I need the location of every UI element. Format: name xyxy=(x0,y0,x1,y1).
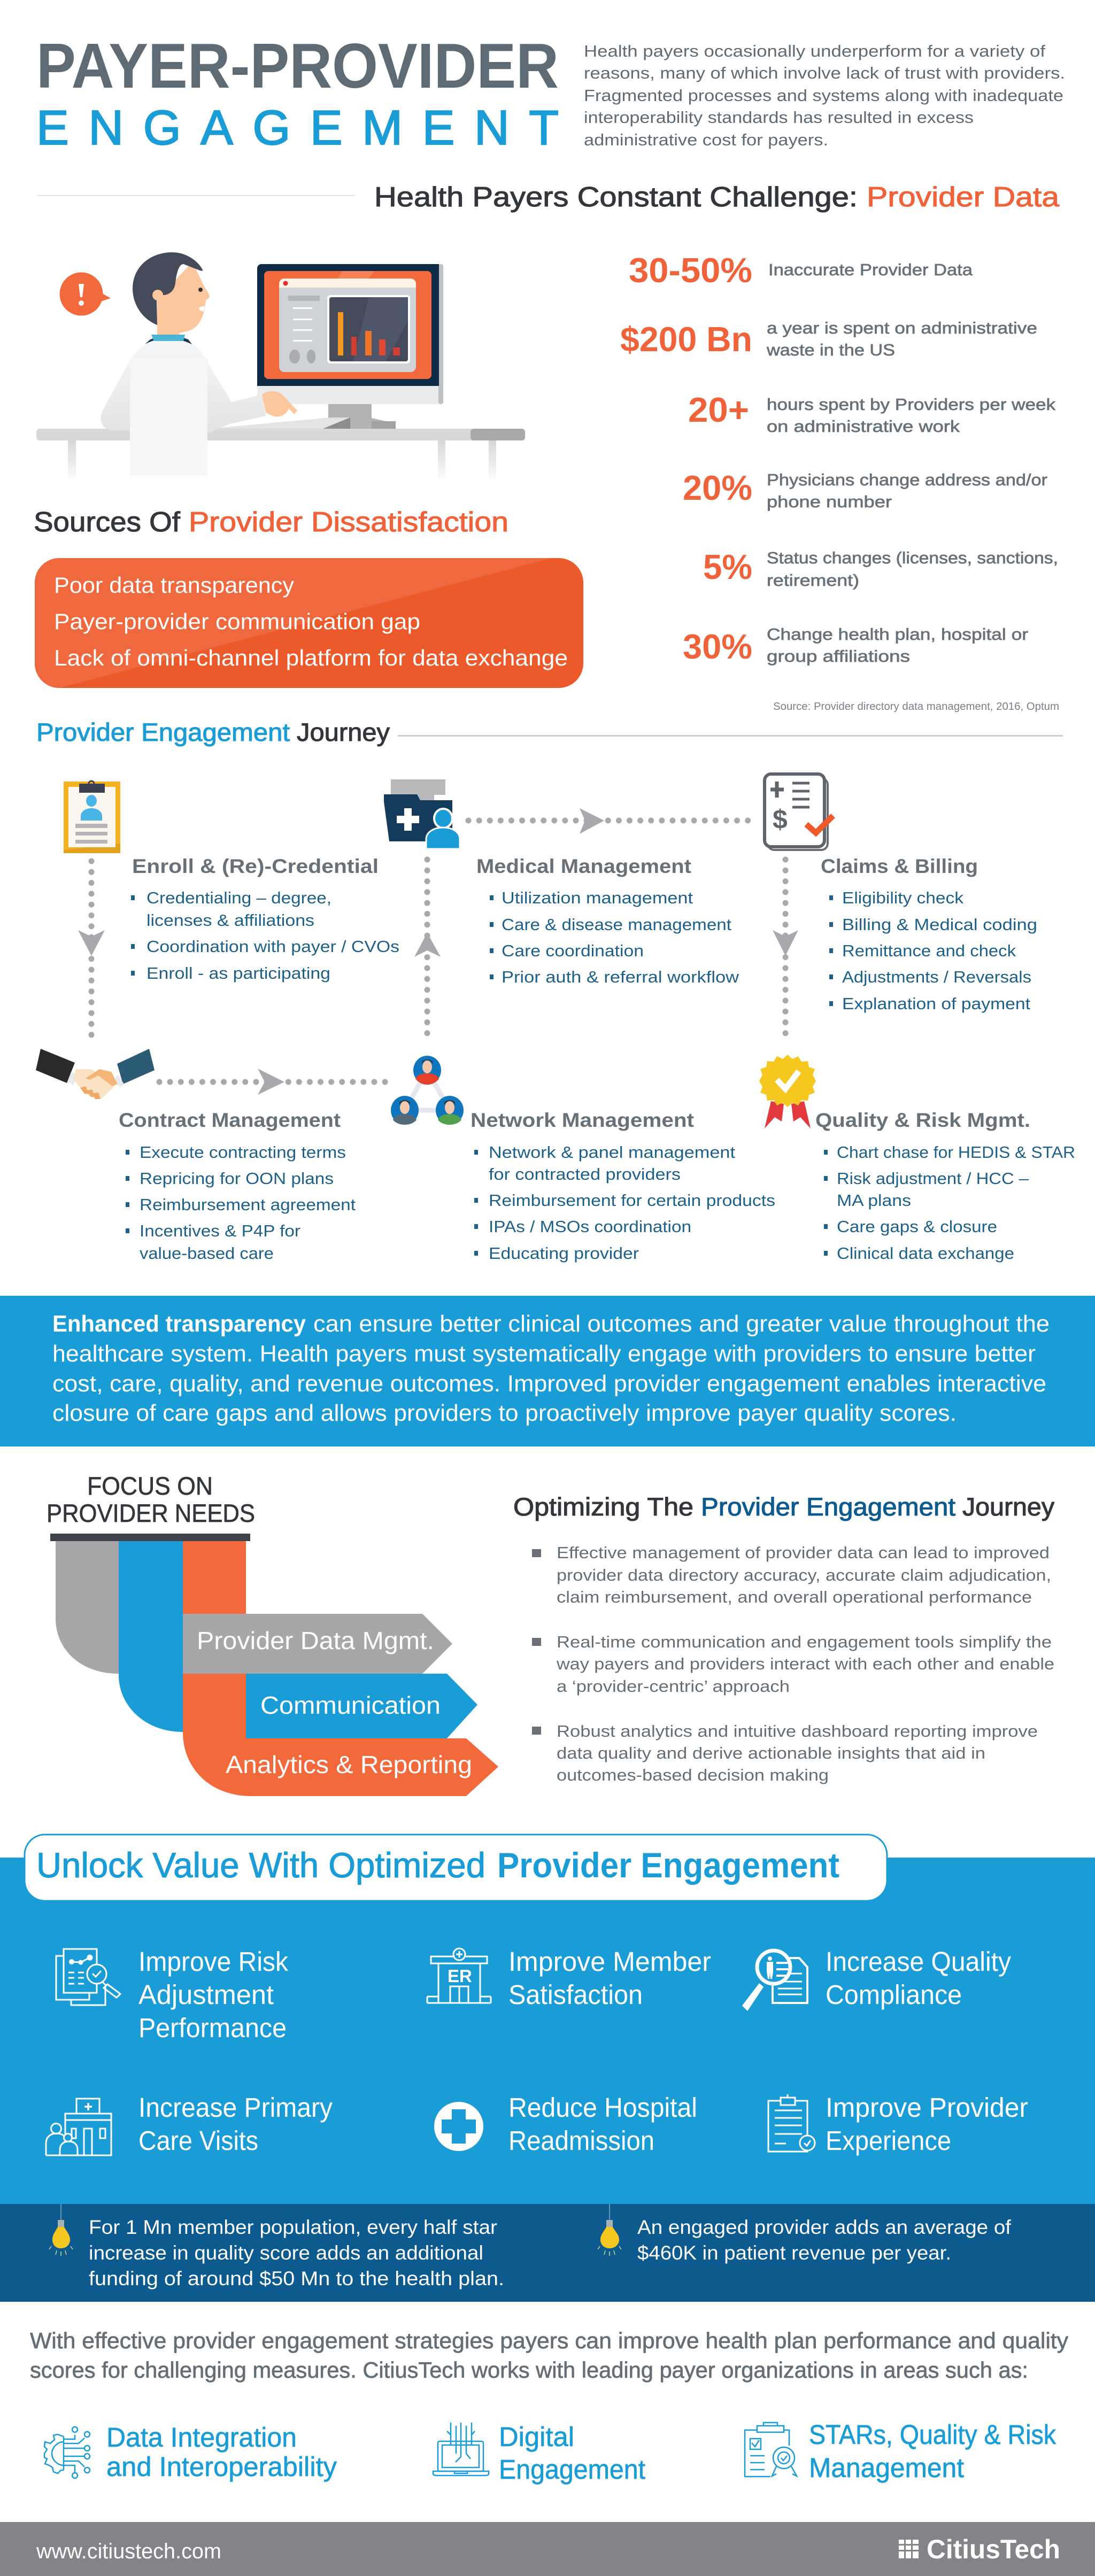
benefit: improve provider experience: Improve Provider xyxy=(826,2092,1028,2123)
intro paragraph: reasons, many of which involve lack of trust with providers. xyxy=(584,64,1065,82)
benefit: improve risk adjustment: Adjustment xyxy=(138,1979,274,2010)
stat: 20+: on administrative work xyxy=(767,417,960,436)
bullet list: Reimbursement for certain products xyxy=(489,1191,775,1210)
panel: revenue facts band xyxy=(0,2204,1095,2302)
point: communication xyxy=(532,1633,1054,1696)
bullet list: Incentives & P4P for xyxy=(140,1221,300,1240)
bullet list xyxy=(490,888,739,986)
bullet list: Care & disease management xyxy=(502,915,731,934)
point: communication: a ‘provider-centric’ approach xyxy=(557,1677,790,1696)
icon: quality medal xyxy=(759,1055,816,1128)
desk xyxy=(36,429,525,478)
fact: quality score funding: increase in quality score adds an additional xyxy=(89,2242,483,2264)
avatar: top xyxy=(413,1056,441,1085)
panel: contract management xyxy=(119,1109,356,1263)
stat: 20%: Physicians change address and/or xyxy=(767,470,1047,489)
bullet list: Reimbursement agreement xyxy=(140,1195,356,1214)
point: communication: way payers and providers interact with each other and enable xyxy=(556,1654,1054,1673)
icon: risk report xyxy=(56,1949,120,2005)
icon: clipboard award xyxy=(745,2423,797,2477)
panel: claims and billing xyxy=(821,855,1037,1013)
stat: 20%: phone number xyxy=(767,492,892,511)
heading: sources of provider dissatisfaction: Provider Dissatisfaction xyxy=(189,507,508,538)
bullet list: Chart chase for HEDIS & STAR xyxy=(837,1143,1075,1162)
bullet list: Enroll - as participating xyxy=(146,964,330,983)
heading: provider engagement journey xyxy=(36,718,1063,746)
stat: $200 Bn: $200 Bn xyxy=(620,320,752,359)
footer xyxy=(0,2522,1095,2576)
heading: provider engagement journey: Journey xyxy=(297,718,390,746)
bullet list: Credentialing – degree, xyxy=(146,888,331,907)
stat: 20+: hours spent by Providers per week xyxy=(767,395,1056,414)
heading: provider engagement journey: Provider Engagement xyxy=(36,718,290,746)
panel: quality and risk management xyxy=(815,1109,1075,1263)
intro paragraph xyxy=(584,42,1065,149)
fact: quality score funding: For 1 Mn member population, every half star xyxy=(89,2216,497,2238)
alert speech bubble xyxy=(60,273,111,315)
stat: 20+ xyxy=(688,390,1056,436)
text block: optimization points xyxy=(532,1543,1054,1784)
icon: ER building: ER xyxy=(448,1966,472,1986)
stat: 20%: 20% xyxy=(683,468,752,507)
intro paragraph: interoperability standards has resulted in excess xyxy=(584,108,974,127)
benefit: increase primary care visits: Care Visits xyxy=(138,2125,258,2156)
bullet list: licenses & affiliations xyxy=(146,911,314,930)
fact: quality score funding xyxy=(49,2204,504,2289)
text block: closing paragraph xyxy=(30,2328,1068,2382)
stat: 30-50% xyxy=(629,251,973,290)
heading: Medical Management xyxy=(476,855,691,877)
heading: sources of provider dissatisfaction xyxy=(34,507,508,538)
bullet list: Execute contracting terms xyxy=(140,1143,346,1162)
point: analytics: outcomes-based decision making xyxy=(557,1766,829,1784)
heading: health payers challenge xyxy=(37,182,1059,213)
benefit: reduce hospital readmission: Reduce Hospital xyxy=(508,2092,697,2123)
heading: focus on provider needs xyxy=(47,1472,255,1527)
ribbon: analytics and reporting: Analytics & Reporting xyxy=(226,1751,472,1778)
doctor figure xyxy=(101,252,297,476)
bullet list: Educating provider xyxy=(489,1244,639,1263)
diagram: provider needs ribbons xyxy=(50,1534,498,1796)
stat: 5%: 5% xyxy=(703,547,752,586)
journey connectors xyxy=(78,808,798,1095)
heading: focus on provider needs: FOCUS ON xyxy=(87,1472,213,1500)
bullet list xyxy=(131,888,399,983)
arrow: medical to claims xyxy=(468,808,751,834)
panel: enhanced transparency band: can ensure better clinical outcomes and greater value throughout the xyxy=(313,1311,1050,1337)
arrow: network to medical xyxy=(414,860,441,1044)
stat: 30%: group affiliations xyxy=(767,647,910,666)
icon: handshake xyxy=(36,1049,155,1099)
heading: unlock value: Provider Engagement xyxy=(497,1845,839,1885)
ribbon: communication: Communication xyxy=(260,1691,441,1719)
benefit: improve provider experience xyxy=(768,2092,1028,2156)
title xyxy=(36,30,559,155)
ribbon: provider data management xyxy=(183,1614,452,1674)
stat: 5% xyxy=(703,547,1058,590)
panel: enhanced transparency band: Enhanced transparency xyxy=(52,1311,306,1337)
benefit: increase primary care visits: Increase Primary xyxy=(138,2092,333,2123)
heading: Claims & Billing xyxy=(821,855,978,877)
bullet list: Billing & Medical coding xyxy=(842,915,1037,934)
benefit: reduce hospital readmission xyxy=(434,2092,697,2156)
area: digital engagement: Engagement xyxy=(499,2454,645,2485)
benefit: increase quality compliance: Increase Quality xyxy=(826,1946,1011,1977)
icon: laptop circuit xyxy=(433,2423,489,2476)
area: data integration xyxy=(44,2422,337,2482)
benefit: increase quality compliance: Compliance xyxy=(826,1979,962,2010)
panel: dissatisfaction sources: Payer-provider communication gap xyxy=(54,609,420,634)
bullet list xyxy=(829,888,1037,1013)
panel: medical management xyxy=(476,855,739,986)
stat: 20+: 20+ xyxy=(688,390,749,429)
stat: 30% xyxy=(683,625,1028,666)
heading: unlock value xyxy=(25,1835,887,1901)
icon: checklist clipboard xyxy=(768,2094,815,2152)
stat: 30-50%: Inaccurate Provider Data xyxy=(768,260,973,279)
benefit: reduce hospital readmission: Readmission xyxy=(508,2125,654,2156)
area: digital engagement xyxy=(433,2422,645,2485)
benefit: increase quality compliance xyxy=(742,1946,1011,2011)
bullet list: Prior auth & referral workflow xyxy=(502,968,739,986)
avatar: right xyxy=(436,1096,464,1125)
icon: magnified document xyxy=(742,1951,807,2011)
bullet list: value-based care xyxy=(140,1244,274,1263)
bullet list: Coordination with payer / CVOs xyxy=(146,937,399,956)
stat: $200 Bn: waste in the US xyxy=(766,341,895,359)
panel: network management xyxy=(471,1109,775,1263)
stat: 30%: 30% xyxy=(683,627,752,666)
icon: medical folder and person xyxy=(384,779,460,849)
bullet list xyxy=(824,1143,1075,1263)
bullet list: Adjustments / Reversals xyxy=(842,968,1031,986)
icon: claims bill with check xyxy=(765,774,833,850)
footer: www.citiustech.com xyxy=(36,2540,221,2563)
icon: light bulb xyxy=(598,2204,621,2256)
intro paragraph: Fragmented processes and systems along with inadequate xyxy=(584,86,1063,105)
benefit: improve member satisfaction: Improve Member xyxy=(508,1946,711,1977)
bullet list: IPAs / MSOs coordination xyxy=(489,1217,691,1236)
panel: dissatisfaction sources: Poor data transparency xyxy=(54,573,294,598)
icon: clinic and people xyxy=(46,2099,111,2155)
area: stars quality and risk: Management xyxy=(809,2453,964,2483)
heading: Enroll & (Re)-Credential xyxy=(132,855,379,877)
avatar: left xyxy=(391,1096,419,1125)
heading: Contract Management xyxy=(119,1109,341,1131)
intro paragraph: administrative cost for payers. xyxy=(584,130,828,149)
panel: enroll and re-credential xyxy=(131,855,399,983)
heading: optimizing the journey xyxy=(513,1492,1055,1521)
benefit: improve provider experience: Experience xyxy=(826,2125,951,2156)
bullet list: Care coordination xyxy=(502,941,644,960)
icon: ER building xyxy=(427,1948,491,2003)
icon: provider network xyxy=(391,1056,464,1125)
icon: light bulb xyxy=(49,2204,73,2256)
point: provider data: Effective management of provider data can lead to improved xyxy=(557,1543,1050,1562)
title: PAYER-PROVIDER xyxy=(36,30,559,102)
stat: $200 Bn: a year is spent on administrative xyxy=(767,319,1037,337)
heading: focus on provider needs: PROVIDER NEEDS xyxy=(47,1499,255,1527)
point: analytics: data quality and derive actionable insights that aid in xyxy=(557,1744,985,1762)
text block: closing paragraph: scores for challenging measures. CitiusTech works with leading payer organizations in areas such as: xyxy=(30,2357,1028,2382)
computer monitor xyxy=(209,264,443,429)
heading: Network Management xyxy=(471,1109,694,1131)
benefit: improve risk adjustment xyxy=(56,1946,288,2043)
panel: enhanced transparency band: closure of care gaps and allows providers to proactively improve payer quality scores. xyxy=(52,1400,957,1426)
icon: gear circuit xyxy=(44,2427,90,2478)
stat: 5%: Status changes (licenses, sanctions, xyxy=(767,548,1058,567)
heading: optimizing the journey: Provider Engagement xyxy=(701,1492,955,1521)
benefit: improve member satisfaction: Satisfaction xyxy=(508,1979,643,2010)
panel: dissatisfaction sources xyxy=(35,558,583,688)
bullet list: MA plans xyxy=(837,1191,911,1210)
bullet list: for contracted providers xyxy=(489,1165,681,1183)
bullet list: Care gaps & closure xyxy=(837,1217,997,1236)
illustration: doctor at computer xyxy=(36,252,525,478)
stat: $200 Bn xyxy=(620,319,1037,359)
arrow: contract to network xyxy=(159,1069,388,1095)
stat: 5%: retirement) xyxy=(767,571,859,590)
heading: Quality & Risk Mgmt. xyxy=(815,1109,1030,1131)
benefit: improve risk adjustment: Performance xyxy=(138,2013,287,2043)
panel: enhanced transparency band: cost, care, quality, and revenue outcomes. Improved provider engagement enables interactive xyxy=(52,1371,1046,1397)
bullet list: Risk adjustment / HCC – xyxy=(837,1169,1029,1188)
point: provider data: claim reimbursement, and overall operational performance xyxy=(557,1588,1032,1606)
bullet list xyxy=(126,1143,356,1263)
benefit: improve member satisfaction xyxy=(427,1946,711,2010)
area: data integration: and Interoperability xyxy=(106,2451,337,2482)
source note: Source: Provider directory data management, 2016, Optum xyxy=(773,701,1059,713)
icon: credential clipboard xyxy=(64,781,120,853)
heading: optimizing the journey: Journey xyxy=(962,1492,1055,1521)
point: analytics: Robust analytics and intuitive dashboard reporting improve xyxy=(557,1722,1038,1740)
stat list xyxy=(620,251,1059,713)
bullet list xyxy=(474,1143,775,1263)
intro paragraph: Health payers occasionally underperform for a variety of xyxy=(584,42,1045,60)
area: data integration: Data Integration xyxy=(106,2422,297,2453)
heading: unlock value: Unlock Value With Optimized xyxy=(36,1845,485,1885)
heading: optimizing the journey: Optimizing The xyxy=(513,1492,693,1521)
benefit: improve risk adjustment: Improve Risk xyxy=(138,1946,288,1977)
fact: engaged provider revenue xyxy=(598,2204,1012,2264)
bullet list: Eligibility check xyxy=(842,888,964,907)
stat: 30-50%: 30-50% xyxy=(629,251,752,290)
stat: 30%: Change health plan, hospital or xyxy=(767,625,1028,644)
bullet list: Utilization management xyxy=(502,888,693,907)
icon: claims bill with check: $ xyxy=(773,804,788,834)
area: digital engagement: Digital xyxy=(499,2422,574,2452)
panel: enhanced transparency band: healthcare system. Health payers must systematically engage with providers to ensure better xyxy=(52,1341,1036,1367)
fact: engaged provider revenue: An engaged provider adds an average of xyxy=(637,2216,1012,2238)
bullet list: Repricing for OON plans xyxy=(140,1169,334,1188)
benefit: increase primary care visits xyxy=(46,2092,333,2156)
ribbon: communication xyxy=(246,1674,477,1738)
bullet list: Explanation of payment xyxy=(842,994,1030,1013)
panel: enhanced transparency band xyxy=(0,1296,1095,1446)
panel: unlock value background xyxy=(0,1858,1095,2204)
point: provider data xyxy=(532,1543,1051,1606)
heading: sources of provider dissatisfaction: Sources Of xyxy=(34,507,181,538)
point: provider data: provider data directory accuracy, accurate claim adjudication, xyxy=(557,1566,1051,1584)
fact: quality score funding: funding of around $50 Mn to the health plan. xyxy=(89,2268,504,2289)
logo: citiustech: CitiusTech xyxy=(927,2534,1060,2564)
title: ENGAGEMENT xyxy=(36,101,559,155)
bullet list: Clinical data exchange xyxy=(837,1244,1014,1263)
area: stars quality and risk xyxy=(745,2419,1056,2483)
stat: 20% xyxy=(683,468,1047,511)
text block: closing paragraph: With effective provider engagement strategies payers can improve health plan performance and quality xyxy=(30,2328,1068,2353)
ribbon: provider data management: Provider Data Mgmt. xyxy=(197,1627,434,1654)
point: communication: Real-time communication and engagement tools simplify the xyxy=(557,1633,1052,1651)
fact: engaged provider revenue: $460K in patient revenue per year. xyxy=(637,2242,951,2264)
icon: medical cross xyxy=(434,2102,483,2151)
panel: dissatisfaction sources: Lack of omni-channel platform for data exchange xyxy=(54,645,568,670)
point: analytics xyxy=(532,1722,1038,1784)
area: stars quality and risk: STARs, Quality & Risk xyxy=(809,2419,1056,2450)
heading: health payers challenge: Health Payers Constant Challenge: xyxy=(374,182,858,213)
bullet list: Remittance and check xyxy=(842,941,1016,960)
arrow: claims to quality xyxy=(773,860,798,1044)
arrow: enroll to contract xyxy=(78,861,105,1046)
heading: health payers challenge: Provider Data xyxy=(867,182,1059,213)
bullet list: Network & panel management xyxy=(489,1143,735,1162)
